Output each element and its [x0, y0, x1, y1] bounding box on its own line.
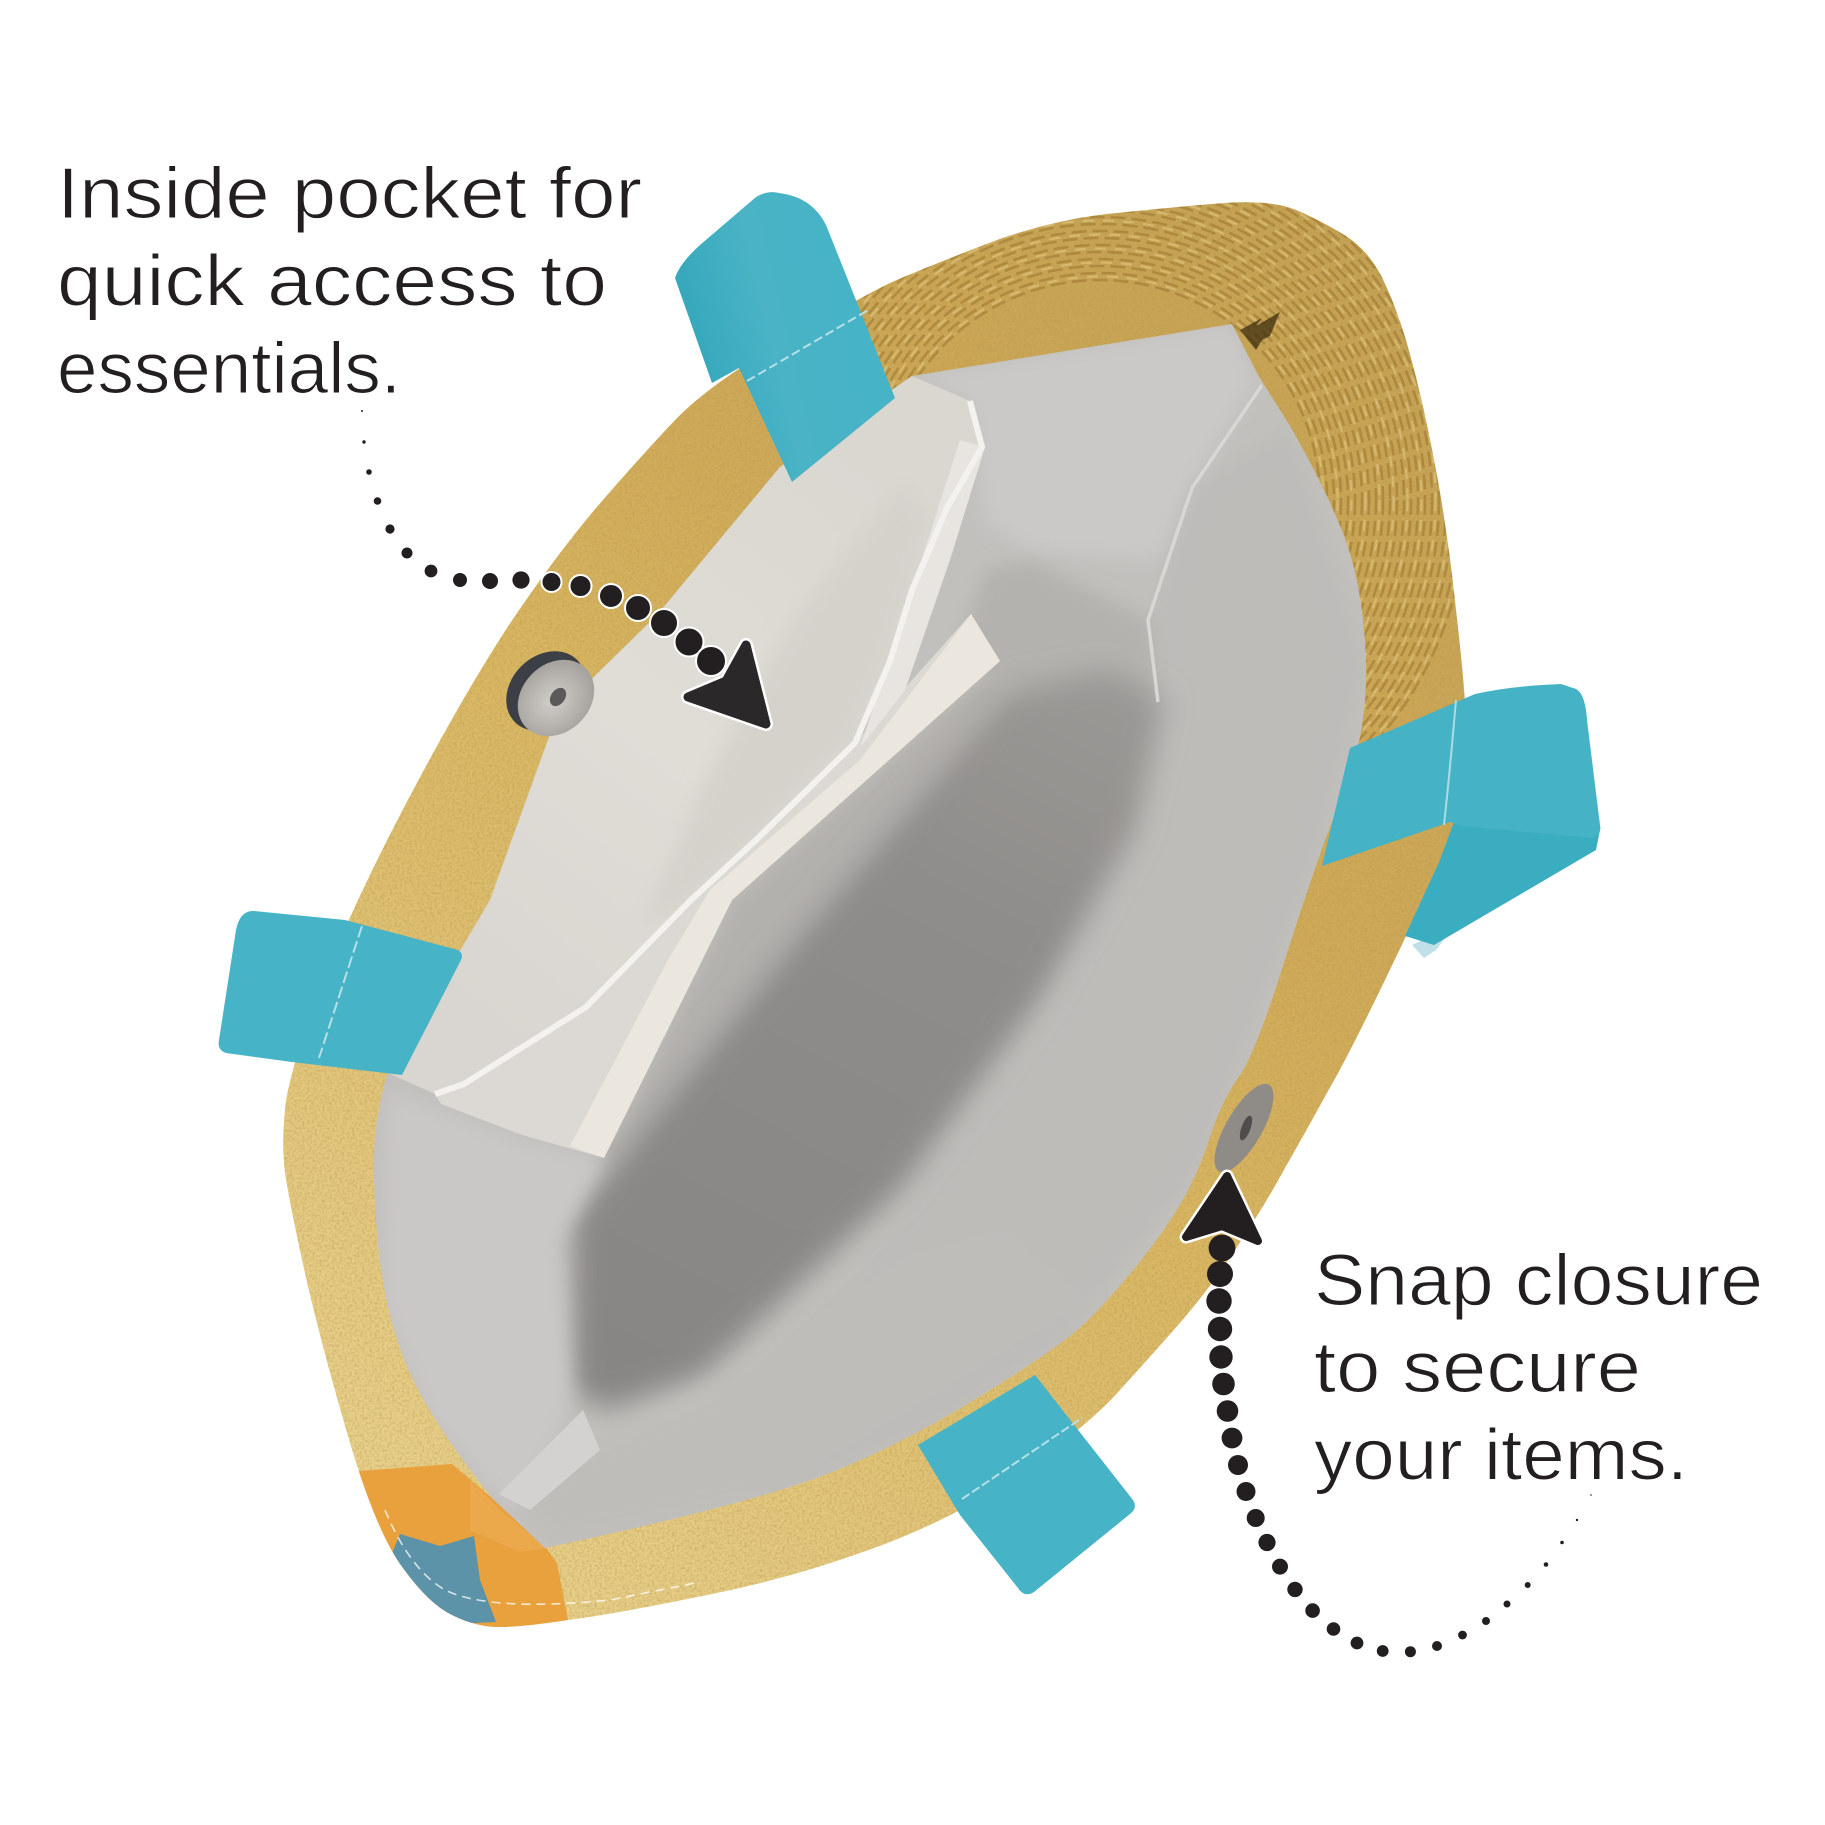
magnetic snap: right: [1203, 1076, 1285, 1180]
corner stitching: [385, 1510, 700, 1604]
pocket darker fold band: [640, 480, 930, 930]
infographic: tote bag interior: [60, 166, 1759, 1658]
arrow: dotted path to pocket: [361, 410, 766, 724]
rim dark creases at top right: [1240, 312, 1280, 350]
callout text: snap closure: your items.: [1314, 1416, 1688, 1496]
bottom wall: [670, 1496, 761, 1520]
wall band beside pocket flap: [620, 678, 996, 1136]
strap: left: [219, 911, 462, 1075]
pocket lower flap: [435, 614, 1000, 1158]
strap: right: [1322, 684, 1600, 958]
back wall panel: [972, 563, 1152, 684]
side seam lower left: [499, 1410, 600, 1510]
blue star print: [385, 1534, 496, 1625]
callout text: inside pocket: essentials.: [57, 329, 401, 409]
side seam upper right: [1148, 385, 1262, 702]
callout text: inside pocket: Inside pocket for: [57, 154, 642, 234]
bag lining interior: [360, 300, 1390, 1560]
strap: top left: [675, 192, 895, 482]
cream fabric band: [570, 614, 1000, 1158]
right wall: [776, 440, 1366, 1492]
inside pocket: [388, 376, 1000, 1158]
left bottom wall: [380, 1090, 604, 1520]
strap: bottom: [918, 1375, 1135, 1594]
arrow: dotted path to snap: [1186, 1176, 1592, 1657]
callout text: snap closure: to secure: [1314, 1328, 1641, 1408]
pocket fold shadow: [860, 440, 985, 748]
magnetic snap: left: [490, 635, 610, 752]
far wall upper: [912, 324, 1255, 560]
bag outer rim: gold fabric: [270, 133, 1480, 1640]
callout text: inside pocket: quick access to: [57, 242, 607, 322]
pocket cord: [435, 401, 982, 1094]
floor shadow: [573, 670, 1165, 1410]
callout text: snap closure: Snap closure: [1314, 1241, 1763, 1321]
pocket upper panel: [388, 376, 982, 1094]
orange star print corner: [358, 1464, 700, 1627]
